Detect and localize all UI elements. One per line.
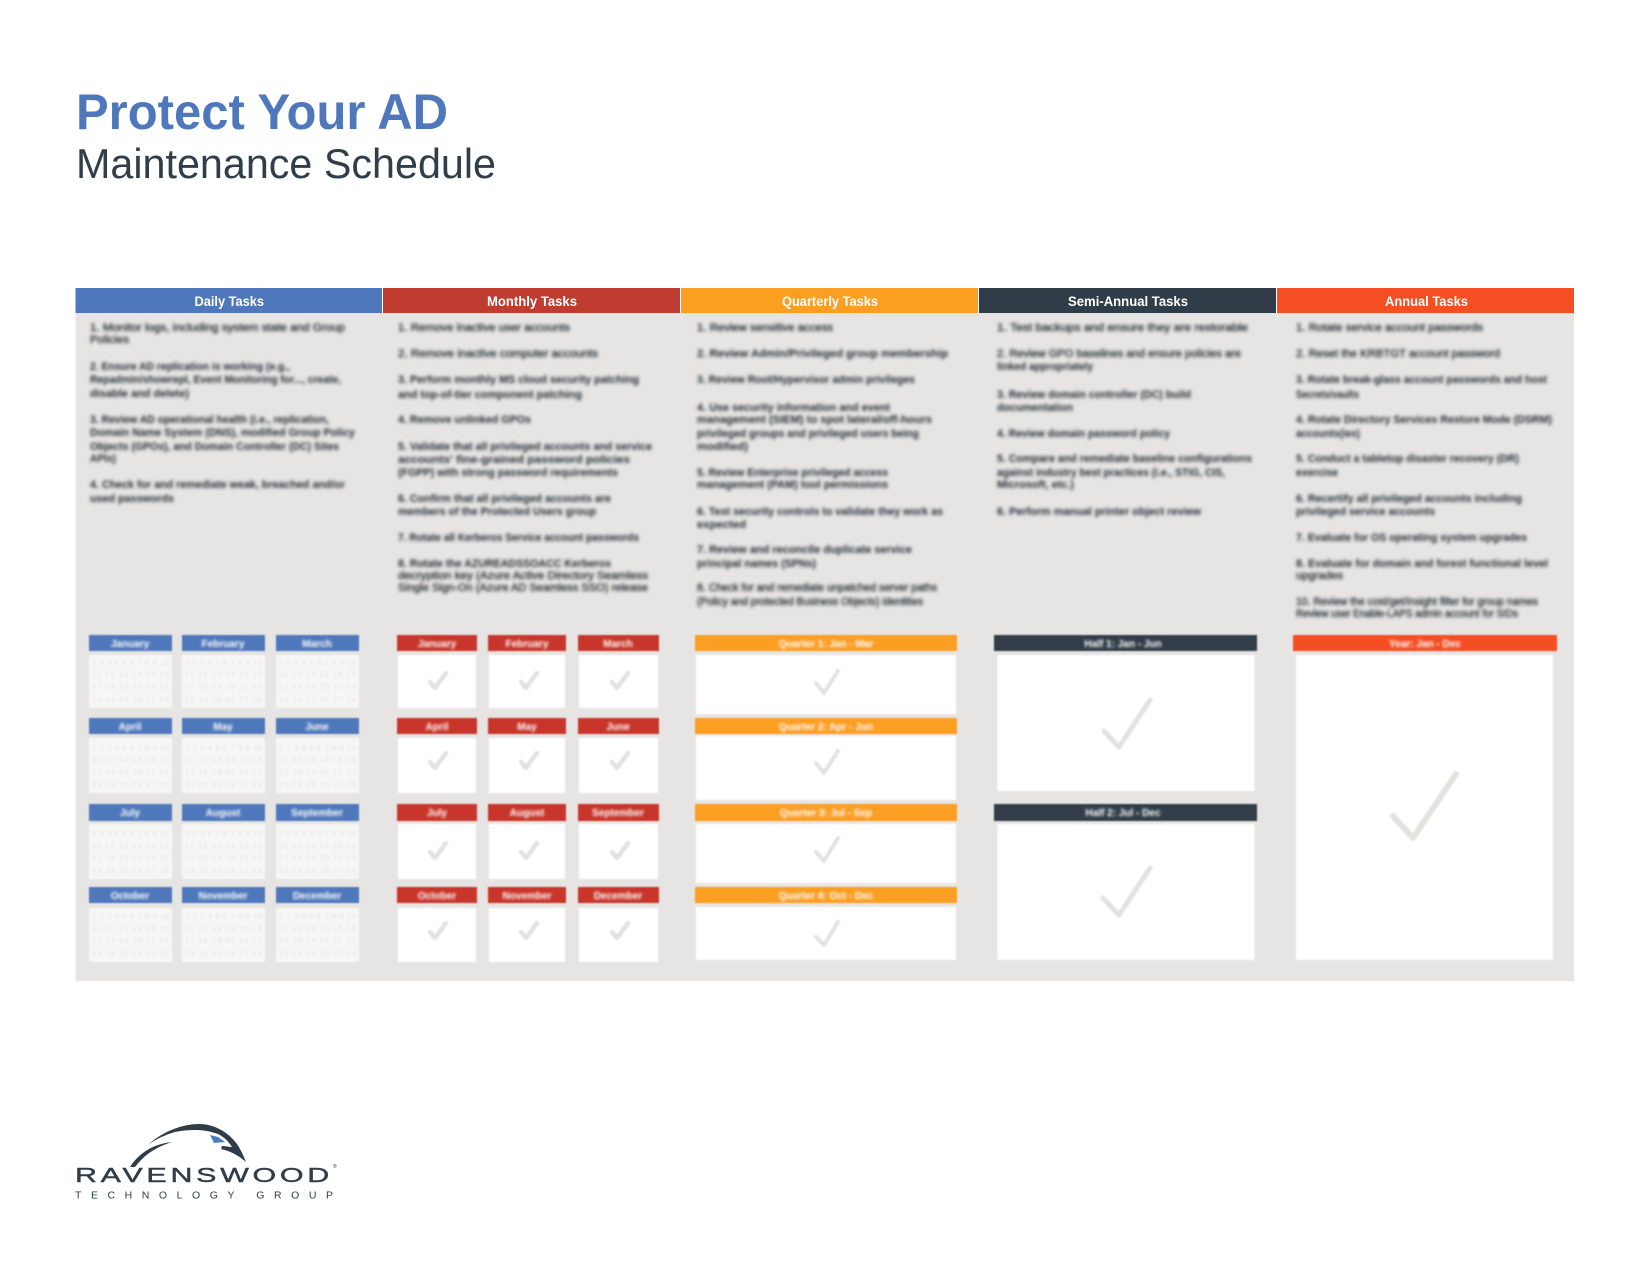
panel: daily tasks [76,288,382,981]
day numbers: daily: 17 18 19 20 21 22 [185,936,262,945]
month labels: monthly: August [510,808,545,819]
day numbers: daily: 23 24 25 26 27 28 [185,949,262,958]
month labels: daily: November [199,891,248,902]
icon: raven head [130,1124,246,1167]
heading: daily tasks [76,288,382,313]
day numbers: daily: 11 12 13 14 15 16 [185,924,262,933]
day numbers: daily: 17 18 19 20 21 22 [279,853,356,862]
month labels: daily: January [111,639,150,650]
day numbers: daily: 17 18 19 20 21 22 [92,936,169,945]
month labels: daily: June [305,722,329,733]
month labels: monthly: February [506,639,549,650]
annual task list: 7. Evaluate for OS operating system upgrades [1296,532,1527,544]
logo: Ravenswood Technology Group [75,1124,337,1202]
annual task list: exercise [1296,467,1338,479]
day numbers: daily: 11 12 13 14 15 16 [92,841,169,850]
monthly task list: 7. Rotate all Kerberos Service account passwords [398,532,639,544]
quarterly task list: 7. Review and reconcile duplicate service [697,544,912,556]
monthly task list: 6. Confirm that all privileged accounts are [398,493,611,505]
annual task list: 10. Review the cost/get/insight filter for group names [1296,596,1538,608]
month labels: monthly: January [418,639,457,650]
day numbers: daily: 1 2 3 4 5 6 7 8 9 10 [279,912,356,921]
monthly task list: 3. Perform monthly MS cloud security patching [398,374,639,386]
daily task list: Objects (GPOs), and Domain Controller (DC) Sites [90,441,339,453]
day numbers: daily: 1 2 3 4 5 6 7 8 9 10 [185,743,262,752]
monthly checklist grid [397,635,659,962]
half-year labels [1084,639,1162,819]
semi-annual task list: 2. Review GPO baselines and ensure policies are [997,348,1241,360]
day numbers: daily: 23 24 25 26 27 28 [279,695,356,704]
day numbers: daily: 17 18 19 20 21 22 [279,767,356,776]
day numbers: daily: 11 12 13 14 15 16 [92,755,169,764]
month labels: monthly: May [517,722,537,733]
subtitle: Maintenance Schedule [76,140,496,187]
icon: check mark annual [1393,774,1456,838]
month labels: daily: August [206,808,241,819]
white cells: semi-annual [998,655,1254,960]
monthly task list: and top-of-tier component patching [398,389,582,401]
day numbers: daily: 17 18 19 20 21 22 [279,936,356,945]
heading: quarterly tasks: Quarterly Tasks [782,293,878,309]
daily calendar grid [89,635,359,962]
month bars: daily [89,635,359,903]
day numbers: daily: 23 24 25 26 27 28 [92,949,169,958]
day numbers: daily: 17 18 19 20 21 22 [279,682,356,691]
month labels: daily: December [293,891,341,902]
annual task list: 2. Reset the KRBTGT account password [1296,348,1500,360]
daily task list: APIs) [90,453,116,465]
annual task list: privileged service accounts [1296,506,1435,518]
annual task list: 5. Conduct a tabletop disaster recovery (DR) [1296,453,1519,465]
quarterly task list: 5. Review Enterprise privileged access [697,467,888,479]
day numbers: daily: 1 2 3 4 5 6 7 8 9 10 [185,912,262,921]
tagline: TECHNOLOGY GROUP [75,1190,333,1202]
day numbers: daily: 23 24 25 26 27 28 [92,780,169,789]
quarterly task list: modified) [697,441,748,453]
quarterly task list: 4. Use security information and event [697,402,890,414]
heading: monthly tasks: Monthly Tasks [487,293,577,309]
monthly task list: Single Sign-On (Azure AD Seamless SSO) release [398,582,648,594]
annual checklist [1293,635,1557,960]
annual task list: 1. Rotate service account passwords [1296,322,1484,334]
month labels: daily: April [119,722,142,733]
day numbers: daily: 11 12 13 14 15 16 [185,755,262,764]
quarterly checklist [695,635,957,960]
day numbers: daily: 11 12 13 14 15 16 [279,670,356,679]
day numbers: daily: 11 12 13 14 15 16 [279,924,356,933]
day numbers: daily: 17 18 19 20 21 22 [185,853,262,862]
annual task list: Review user Enable-LAPS admin account for SIDs [1296,608,1518,620]
daily task list: used passwords [90,493,174,505]
month labels: monthly: December [594,891,642,902]
daily task list: Policies [90,334,130,346]
day numbers: daily: 17 18 19 20 21 22 [185,767,262,776]
day numbers: daily: 23 24 25 26 27 28 [185,780,262,789]
monthly task list: accounts' fine-grained password policies [398,454,630,466]
semi-annual task list: 5. Compare and remediate baseline configurations [997,453,1252,465]
semi-annual task list: against industry best practices (i.e., STIG, CIS, [997,467,1225,479]
quarterly task list: 3. Review Root/Hypervisor admin privileges [697,374,915,386]
monthly task list: decryption key (Azure Active Directory Seamless [398,570,649,582]
title [76,84,496,187]
month labels: daily: September [291,808,343,819]
icon: check marks semi-annual [1103,700,1150,915]
quarterly task list: privileged groups and privileged users being [697,428,919,440]
monthly task list: 4. Remove unlinked GPOs [398,414,531,426]
quarterly task list [697,322,948,608]
panel: annual tasks [1277,288,1574,981]
quarter labels [779,639,874,902]
heading: annual tasks: Annual Tasks [1385,293,1468,309]
day numbers: daily: 1 2 3 4 5 6 7 8 9 10 [279,658,356,667]
heading: quarterly tasks [681,288,978,313]
month labels: monthly: June [606,722,630,733]
day numbers: daily: 23 24 25 26 27 28 [185,866,262,875]
panel: semi-annual tasks [978,288,1277,981]
semi-annual task list: 3. Review domain controller (DC) build [997,389,1191,401]
quarterly task list: 1. Review sensitive access [697,322,834,334]
white cells: monthly [398,655,658,962]
day numbers: daily: 17 18 19 20 21 22 [92,853,169,862]
monthly task list: 1. Remove inactive user accounts [398,322,571,334]
white cells: quarterly [696,655,956,960]
day numbers: daily: 23 24 25 26 27 28 [279,949,356,958]
quarter labels: Quarter 2: Apr - Jun [779,722,873,733]
day numbers: daily [92,658,356,958]
day numbers: daily: 1 2 3 4 5 6 7 8 9 10 [185,829,262,838]
annual task list: 8. Evaluate for domain and forest functional level [1296,558,1548,570]
day numbers: daily: 1 2 3 4 5 6 7 8 9 10 [92,829,169,838]
day numbers: daily: 23 24 25 26 27 28 [279,780,356,789]
semi-annual task list: Microsoft, etc.) [997,479,1074,491]
day numbers: daily: 11 12 13 14 15 16 [185,841,262,850]
day numbers: daily: 11 12 13 14 15 16 [279,755,356,764]
month labels: daily: February [202,639,245,650]
daily task list: Domain Name System (DNS), modified Group Policy [90,427,356,439]
year label: Year: Jan - Dec [1389,639,1461,650]
heading: annual tasks [1277,288,1574,313]
month labels: monthly: April [426,722,449,733]
quarterly task list: expected [697,519,746,531]
day numbers: daily: 1 2 3 4 5 6 7 8 9 10 [279,743,356,752]
monthly task list: 8. Rotate the AZUREADSSOACC Kerberos [398,558,611,570]
annual task list [1296,322,1552,620]
month labels: daily: July [120,808,140,819]
semi-annual task list: linked appropriately [997,361,1094,373]
month labels: daily: May [213,722,233,733]
heading: semi-annual tasks [979,288,1276,313]
month labels: monthly: July [427,808,447,819]
quarterly task list: 6. Test security controls to validate they work as [697,506,943,518]
wordmark: RAVENSWOOD [75,1164,333,1187]
semi-annual task list: documentation [997,402,1073,414]
month labels: monthly [418,639,644,902]
quarterly task list: 2. Review Admin/Privileged group membership [697,348,948,360]
icon: check marks quarterly [816,671,838,945]
icon: check marks monthly [430,673,628,938]
day numbers: daily: 23 24 25 26 27 28 [92,866,169,875]
heading: semi-annual tasks: Semi-Annual Tasks [1068,293,1188,309]
month labels: daily: March [302,639,332,650]
semi-annual task list: 1. Test backups and ensure they are restorable [997,322,1248,334]
daily task list: Repadmin/showrepl, Event Monitoring for..., create, [90,374,341,386]
month labels: monthly: September [592,808,644,819]
day numbers: daily: 17 18 19 20 21 22 [185,682,262,691]
annual task list: 3. Rotate break-glass account passwords and host [1296,374,1547,386]
title: Protect Your AD [76,84,448,140]
quarter labels: Quarter 4: Oct - Dec [779,891,874,902]
panel: quarterly tasks [681,288,979,981]
day numbers: daily: 1 2 3 4 5 6 7 8 9 10 [92,658,169,667]
half-year labels: Half 2: Jul - Dec [1085,808,1161,819]
month bars: monthly [397,635,659,903]
day numbers: daily: 17 18 19 20 21 22 [92,682,169,691]
month labels: monthly: October [418,891,456,902]
month labels: monthly: March [603,639,633,650]
monthly task list: 5. Validate that all privileged accounts and service [398,441,652,453]
semi-annual checklist [994,635,1257,960]
annual task list: Secrets/vaults [1296,389,1359,401]
monthly task list: members of the Protected Users group [398,506,596,518]
day numbers: daily: 23 24 25 26 27 28 [279,866,356,875]
annual task list: 4. Rotate Directory Services Restore Mode (DSRM) [1296,414,1552,426]
quarterly task list: principal names (SPNs) [697,558,816,570]
day numbers: daily: 23 24 25 26 27 28 [92,695,169,704]
day numbers: daily: 17 18 19 20 21 22 [92,767,169,776]
quarterly task list: management (PAM) tool permissions [697,479,888,491]
semi-annual task list: 6. Perform manual printer object review [997,506,1201,518]
annual task list: upgrades [1296,570,1344,582]
half-year labels: Half 1: Jan - Jun [1084,639,1162,650]
daily task list [90,322,356,505]
day numbers: daily: 1 2 3 4 5 6 7 8 9 10 [92,743,169,752]
day numbers: daily: 1 2 3 4 5 6 7 8 9 10 [185,658,262,667]
daily task list: 2. Ensure AD replication is working (e.g., [90,361,290,373]
month labels: daily [111,639,343,902]
month labels: daily: October [111,891,149,902]
quarterly task list: (Policy and protected Business Objects) identities [697,596,923,608]
quarter labels: Quarter 1: Jan - Mar [779,639,873,650]
heading: monthly tasks [383,288,680,313]
semi-annual task list: 4. Review domain password policy [997,428,1171,440]
daily task list: disable and delete) [90,388,189,400]
panel: monthly tasks [382,288,681,981]
month labels: monthly: November [503,891,552,902]
day numbers: daily: 11 12 13 14 15 16 [185,670,262,679]
day numbers: daily: 11 12 13 14 15 16 [92,924,169,933]
quarterly task list: 8. Check for and remediate unpatched server paths [697,582,937,594]
annual task list: accounts(ies) [1296,428,1360,440]
year bar [1293,635,1557,651]
annual task list: 6. Recertify all privileged accounts including [1296,493,1522,505]
monthly task list: (FGPP) with strong password requirements [398,467,618,479]
daily task list: 1. Monitor logs, including system state and Group [90,322,345,334]
heading: daily tasks: Daily Tasks [194,293,264,309]
day numbers: daily: 11 12 13 14 15 16 [279,841,356,850]
quarterly task list: management (SIEM) to spot lateral/off-hours [697,414,932,426]
monthly task list [398,322,652,594]
half-year bars [994,635,1257,821]
day numbers: daily: 1 2 3 4 5 6 7 8 9 10 [92,912,169,921]
day numbers: daily: 23 24 25 26 27 28 [185,695,262,704]
daily task list: 4. Check for and remediate weak, breached and/or [90,479,346,491]
daily task list: 3. Review AD operational health (i.e., replication, [90,414,329,426]
white cell: annual [1296,655,1553,960]
day numbers: daily: 11 12 13 14 15 16 [92,670,169,679]
day numbers: daily: 1 2 3 4 5 6 7 8 9 10 [279,829,356,838]
monthly task list: 2. Remove inactive computer accounts [398,348,599,360]
quarter labels: Quarter 3: Jul - Sep [780,808,872,819]
registered mark: ® [333,1163,337,1170]
semi-annual task list [997,322,1252,518]
quarter bars [695,635,957,903]
day cells: daily [89,655,359,962]
